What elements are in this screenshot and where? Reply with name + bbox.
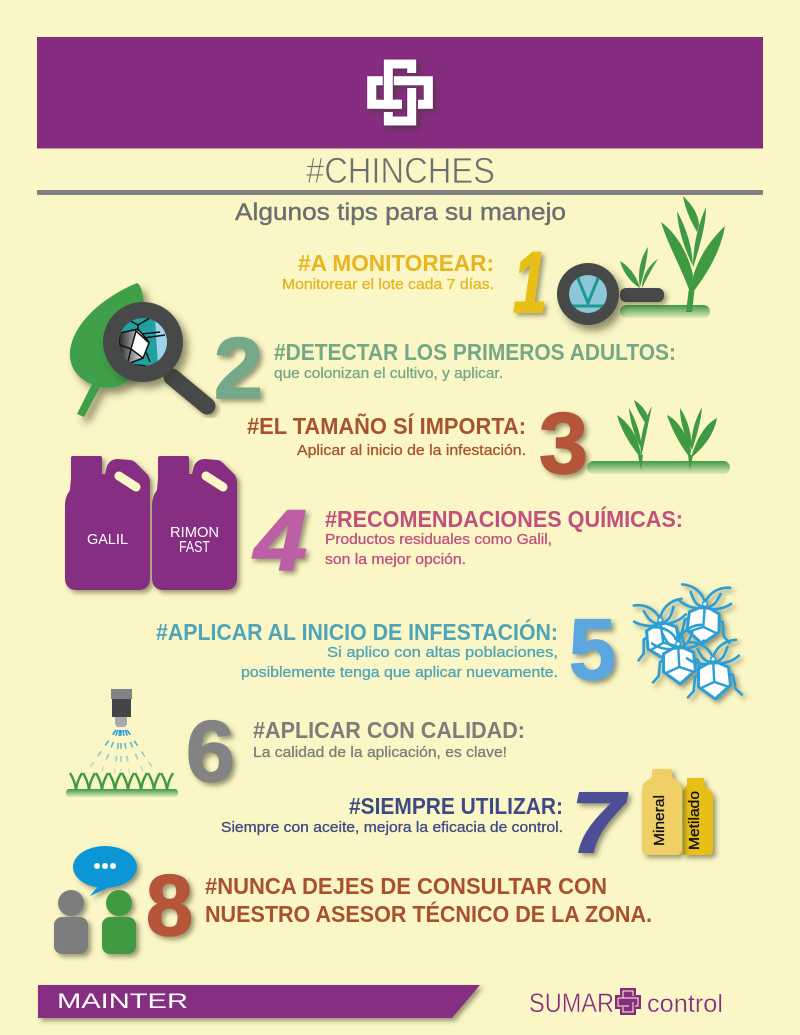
heading 8 second line: NUESTRO ASESOR TÉCNICO DE LA ZONA. (205, 900, 652, 927)
icon: jug Rimon Fast: RIMON (170, 525, 219, 541)
icon: jug Rimon Fast (152, 456, 237, 590)
heading 4: #RECOMENDACIONES QUÍMICAS: (325, 505, 683, 532)
icon: jug Rimon Fast: FAST (179, 539, 210, 556)
icon: bottle Metilado: Metilado (687, 791, 703, 850)
heading 1: #A MONITOREAR: (298, 250, 494, 276)
step 8 (54, 846, 652, 954)
heading 7: #SIEMPRE UTILIZAR: (349, 793, 563, 819)
text 3: Aplicar al inicio de la infestación. (297, 443, 526, 459)
text 4: Productos residuales como Galil, (325, 532, 552, 548)
number 3: 3 (539, 396, 588, 492)
icon: plants and magnifier (557, 196, 725, 325)
heading 2: #DETECTAR LOS PRIMEROS ADULTOS: (274, 339, 676, 365)
number 2: 2 (214, 321, 263, 417)
step 5 (156, 584, 742, 700)
text 5: Si aplico con altas poblaciones, (327, 645, 558, 661)
heading 6: #APLICAR CON CALIDAD: (253, 717, 525, 743)
text 1: Monitorear el lote cada 7 días. (282, 277, 494, 293)
icon: bottle Metilado (683, 778, 713, 855)
icon: bottle Mineral: Mineral (652, 795, 668, 846)
footer band (38, 985, 480, 1018)
icon: bottle Mineral (642, 769, 682, 855)
heading 3: #EL TAMAÑO SÍ IMPORTA: (247, 412, 526, 439)
text 2: que colonizan el cultivo, y aplicar. (274, 366, 503, 382)
footer logo SUMAR control: SUMAR (529, 988, 614, 1018)
step 2 (70, 283, 676, 417)
icon: two people with speech bubble (54, 846, 137, 954)
text 7: Siempre con aceite, mejora la eficacia de control. (221, 820, 563, 836)
step 3 (247, 396, 730, 492)
number 1: 1 (513, 235, 547, 331)
step 1 (282, 196, 725, 331)
icon: sprayer over grass (66, 689, 178, 797)
icon: bugs (631, 584, 742, 700)
icon: jug Galil (65, 456, 150, 590)
icon: header logo (372, 64, 428, 121)
text 4 second line: son la mejor opción. (325, 552, 466, 568)
step 4 (65, 456, 683, 590)
number 5: 5 (569, 602, 616, 698)
number 7: 7 (571, 775, 629, 871)
icon: jug Galil: GALIL (87, 532, 128, 548)
number 6: 6 (186, 704, 235, 800)
icon: young plants (587, 400, 730, 474)
footer logo SUMAR control (529, 988, 723, 1018)
header band (37, 37, 763, 148)
number 4: 4 (252, 493, 307, 589)
title: #CHINCHES (306, 150, 495, 191)
footer brand MAINTER: MAINTER (57, 990, 188, 1013)
text 6: La calidad de la aplicación, es clave! (253, 745, 507, 761)
heading 8: #NUNCA DEJES DE CONSULTAR CON (205, 873, 607, 899)
number 8: 8 (146, 858, 193, 954)
step 6 (66, 689, 525, 800)
divider (37, 190, 763, 195)
step 7 (221, 769, 713, 871)
subtitle: Algunos tips para su manejo (235, 199, 566, 226)
footer logo SUMAR control: control (647, 990, 723, 1018)
text 5 second line: posiblemente tenga que aplicar nuevamente. (241, 665, 558, 681)
heading 5: #APLICAR AL INICIO DE INFESTACIÓN: (156, 618, 558, 645)
icon: leaf and magnifier with bug (70, 283, 207, 417)
